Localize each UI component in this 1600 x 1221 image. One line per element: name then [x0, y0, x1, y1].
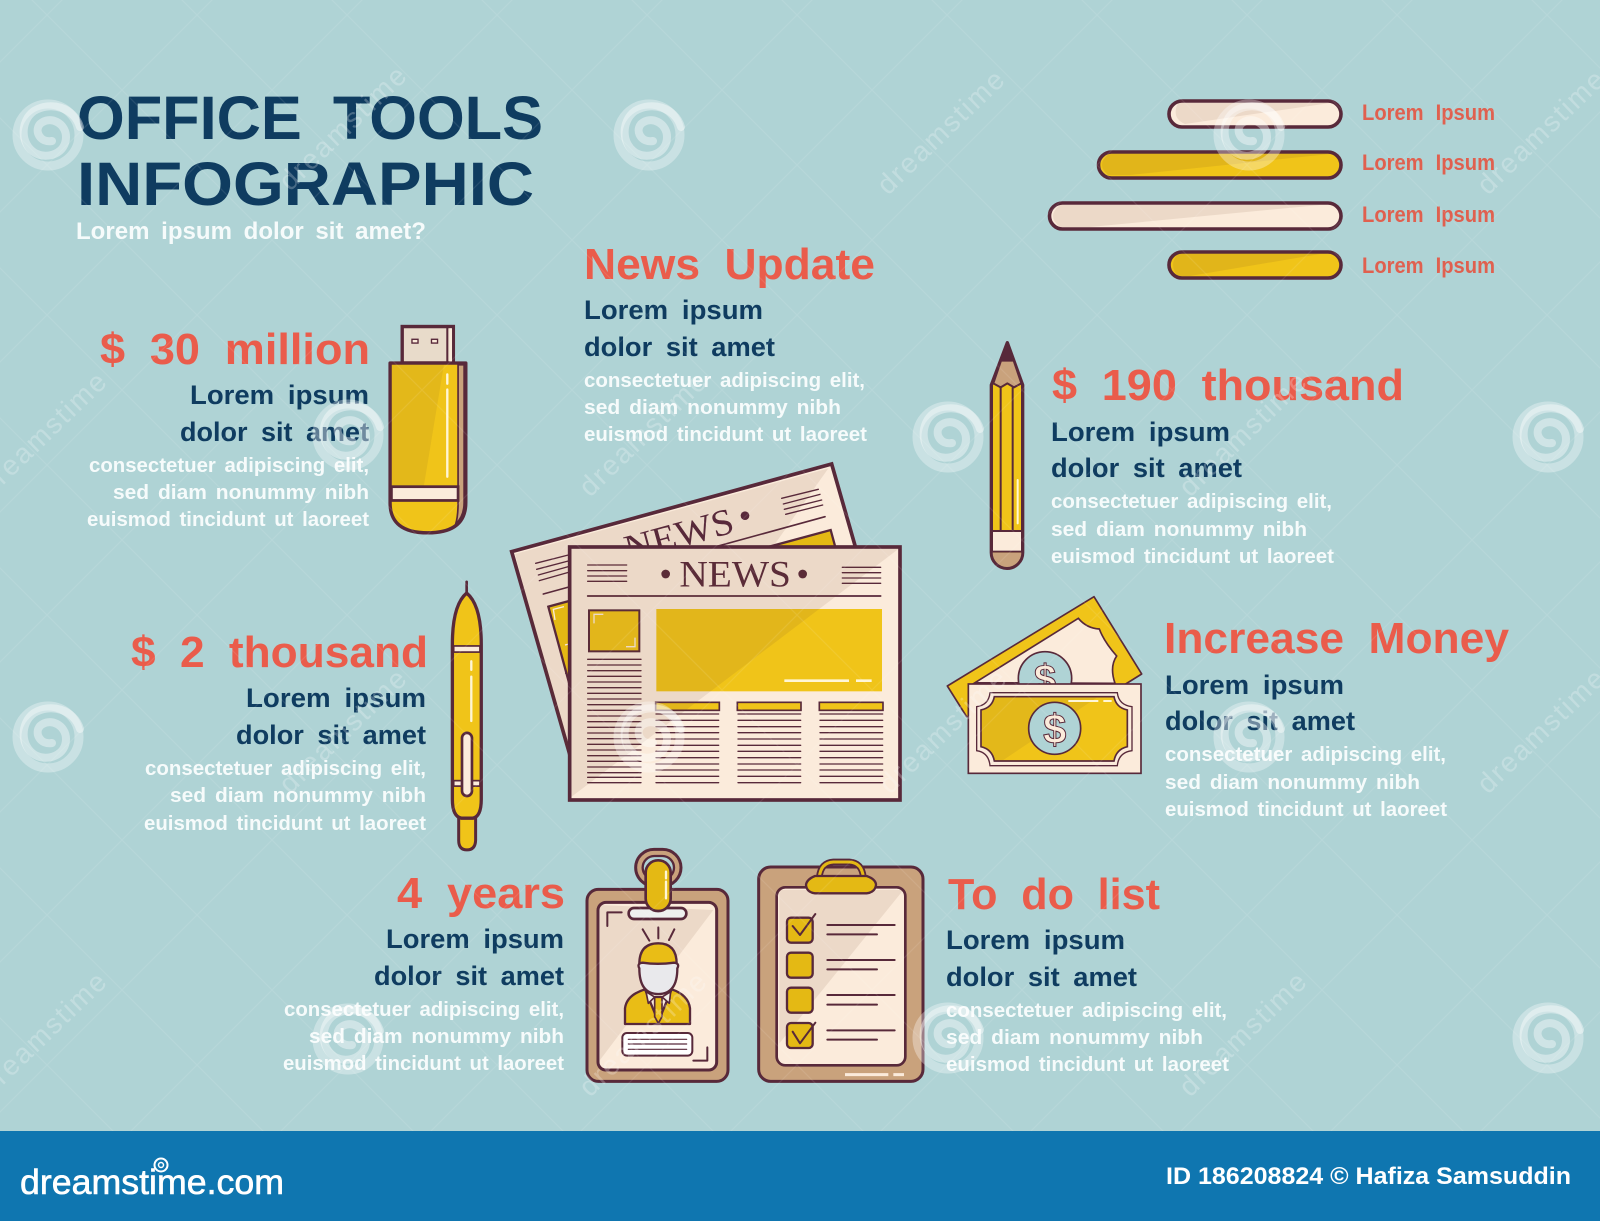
- back newspaper: [512, 464, 894, 769]
- text block: $ 190 thousand: euismod tincidunt ut laoreet: [1051, 545, 1334, 568]
- text block: Increase Money: dolor sit amet: [1165, 706, 1355, 736]
- front banknote: [968, 684, 1141, 773]
- text block: Increase Money: consectetuer adipiscing elit,: [1165, 743, 1446, 766]
- icon: ID badge: [587, 849, 728, 1081]
- logo spiral: [154, 1158, 168, 1172]
- footer band: [0, 1131, 1600, 1221]
- bar 3: [1050, 202, 1495, 229]
- text block: 4 years: dolor sit amet: [374, 961, 564, 991]
- text block: 4 years: euismod tincidunt ut laoreet: [283, 1052, 564, 1075]
- text block: 4 years: 4 years: [397, 869, 565, 918]
- watermark overlay: dreamstime: [573, 365, 714, 502]
- text block: $ 2 thousand: [131, 628, 428, 835]
- text block: To do list: [946, 870, 1229, 1076]
- watermark overlay: dreamstime: [873, 662, 1014, 799]
- text block: News Update: sed diam nonummy nibh: [584, 396, 841, 419]
- name plate: [622, 1033, 692, 1056]
- bar 2: [1098, 150, 1495, 178]
- text block: To do list: To do list: [948, 870, 1160, 919]
- text block: Increase Money: [1164, 614, 1510, 821]
- text block: To do list: euismod tincidunt ut laoreet: [946, 1053, 1229, 1076]
- text block: $ 190 thousand: $ 190 thousand: [1052, 361, 1404, 410]
- bar 3: Lorem Ipsum: [1362, 202, 1495, 227]
- watermark overlay: dreamstime: [273, 662, 414, 799]
- badge clip: [646, 860, 671, 911]
- front banknote: $: [1043, 705, 1066, 752]
- footer logo: dreamstime.com: [20, 1163, 284, 1202]
- watermark overlay: dreamstime: [573, 965, 714, 1102]
- checkbox rows: [787, 914, 895, 1048]
- clipboard clasp: [819, 862, 863, 877]
- text block: $ 2 thousand: consectetuer adipiscing elit,: [145, 757, 426, 780]
- person portrait: [625, 943, 690, 1024]
- icon: pen: [452, 582, 481, 850]
- text block: $ 2 thousand: sed diam nonummy nibh: [170, 784, 426, 807]
- text block: $ 30 million: Lorem ipsum: [190, 380, 369, 410]
- icon: pencil: [991, 343, 1023, 568]
- icon: USB drive: [390, 327, 466, 533]
- text block: To do list: Lorem ipsum: [946, 925, 1125, 955]
- text block: $ 190 thousand: Lorem ipsum: [1051, 417, 1230, 447]
- text block: 4 years: Lorem ipsum: [386, 924, 564, 954]
- title line 1: OFFICE TOOLS: [77, 84, 543, 152]
- text block: $ 30 million: euismod tincidunt ut laoreet: [87, 508, 369, 531]
- left text column: [588, 659, 641, 783]
- masthead NEWS: NEWS: [679, 555, 791, 596]
- back banknote: $: [1034, 658, 1056, 702]
- watermark overlay: dreamstime: [273, 59, 414, 196]
- watermark overlay: dreamstime: [1173, 965, 1314, 1102]
- bar 1: [1169, 100, 1495, 127]
- text block: Increase Money: Lorem ipsum: [1165, 670, 1344, 700]
- text block: News Update: consectetuer adipiscing elit,: [584, 369, 865, 392]
- bar 4: [1169, 252, 1495, 278]
- title block: [76, 84, 543, 245]
- text block: $ 2 thousand: Lorem ipsum: [246, 683, 426, 713]
- text block: $ 30 million: consectetuer adipiscing elit,: [89, 454, 369, 477]
- main image block: [656, 609, 882, 691]
- lanyard ring: [636, 849, 681, 886]
- text block: 4 years: consectetuer adipiscing elit,: [284, 998, 564, 1021]
- text block: 4 years: [283, 869, 565, 1075]
- text block: News Update: euismod tincidunt ut laoreet: [584, 423, 867, 446]
- text block: To do list: dolor sit amet: [946, 962, 1137, 992]
- text block: News Update: [584, 240, 875, 446]
- back newspaper: NEWS: [620, 501, 738, 570]
- text block: $ 2 thousand: dolor sit amet: [236, 720, 426, 750]
- text block: $ 2 thousand: euismod tincidunt ut laoreet: [144, 812, 426, 835]
- photo box: [589, 610, 639, 651]
- watermark overlay: dreamstime: [871, 63, 1012, 200]
- text block: Increase Money: sed diam nonummy nibh: [1165, 771, 1420, 794]
- text block: To do list: consectetuer adipiscing elit,: [946, 999, 1227, 1022]
- text block: Increase Money: euismod tincidunt ut laoreet: [1165, 798, 1447, 821]
- text block: $ 30 million: sed diam nonummy nibh: [113, 481, 369, 504]
- text block: 4 years: sed diam nonummy nibh: [309, 1025, 564, 1048]
- text block: Increase Money: Increase Money: [1164, 614, 1510, 663]
- text block: $ 190 thousand: sed diam nonummy nibh: [1051, 518, 1307, 541]
- text block: $ 190 thousand: consectetuer adipiscing elit,: [1051, 490, 1332, 513]
- bar chart: [1050, 100, 1495, 278]
- bar 2: Lorem Ipsum: [1362, 150, 1495, 175]
- text columns: [656, 714, 719, 783]
- text block: News Update: News Update: [584, 240, 875, 289]
- front newspaper: [570, 547, 900, 800]
- watermark overlay: dreamstime: [1173, 365, 1314, 502]
- bar 1: Lorem Ipsum: [1362, 100, 1495, 125]
- text block: $ 190 thousand: dolor sit amet: [1051, 453, 1242, 483]
- footer credit: ID 186208824 © Hafiza Samsuddin: [1166, 1163, 1571, 1190]
- text block: $ 30 million: dolor sit amet: [180, 417, 369, 447]
- text block: $ 2 thousand: $ 2 thousand: [131, 628, 428, 677]
- title line 2: INFOGRAPHIC: [77, 150, 534, 218]
- back banknote: [947, 597, 1142, 717]
- text block: News Update: dolor sit amet: [584, 332, 775, 362]
- text block: News Update: Lorem ipsum: [584, 295, 763, 325]
- text block: $ 30 million: $ 30 million: [100, 325, 370, 374]
- icon: newspapers: [512, 464, 900, 800]
- subtitle: Lorem ipsum dolor sit amet?: [76, 218, 426, 245]
- icon: money: [947, 597, 1142, 773]
- text block: To do list: sed diam nonummy nibh: [946, 1026, 1203, 1049]
- icon: clipboard to-do list: [759, 862, 923, 1081]
- column headers: [656, 702, 719, 710]
- text block: $ 30 million: [87, 325, 370, 531]
- bar 4: Lorem Ipsum: [1362, 253, 1495, 278]
- text block: $ 190 thousand: [1051, 361, 1404, 568]
